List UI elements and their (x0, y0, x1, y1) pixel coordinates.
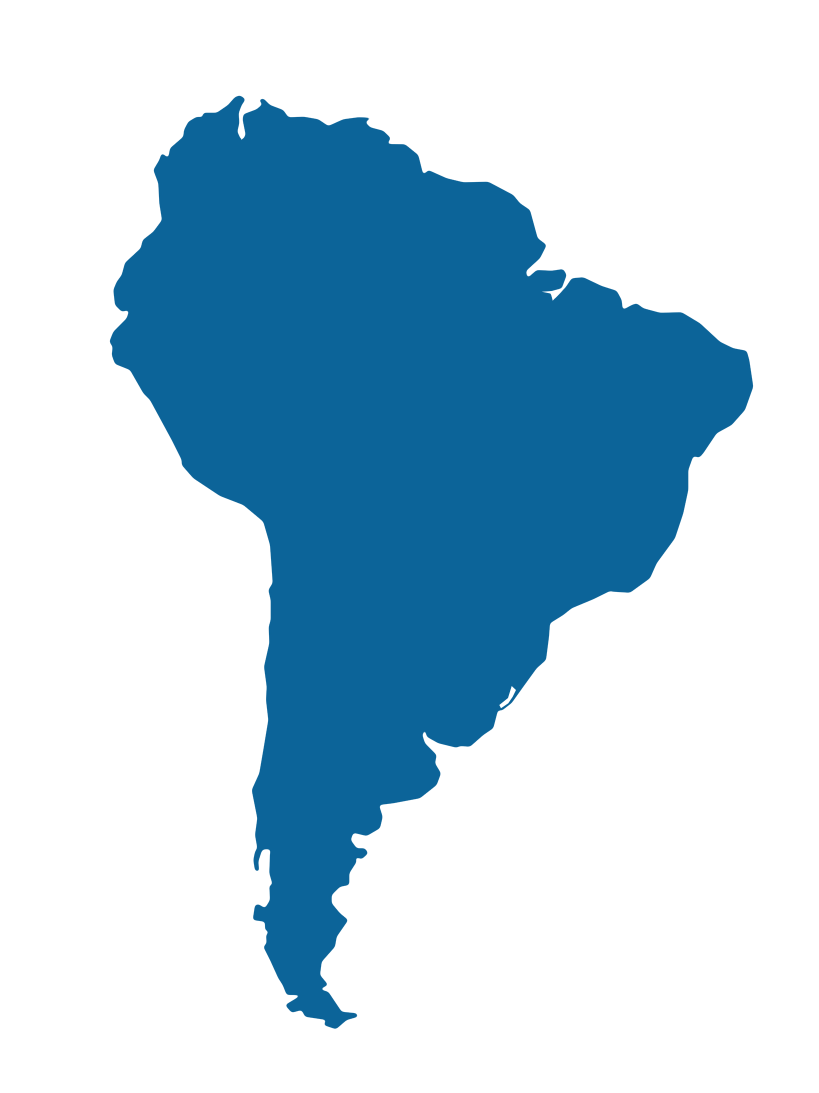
map: South America silhouette (109, 95, 753, 1029)
lake: Lake Maracaibo inlet (238, 102, 250, 140)
lagoon: Lagoa dos Patos (499, 686, 516, 708)
inlet: Amazon mouth channel (542, 291, 557, 301)
